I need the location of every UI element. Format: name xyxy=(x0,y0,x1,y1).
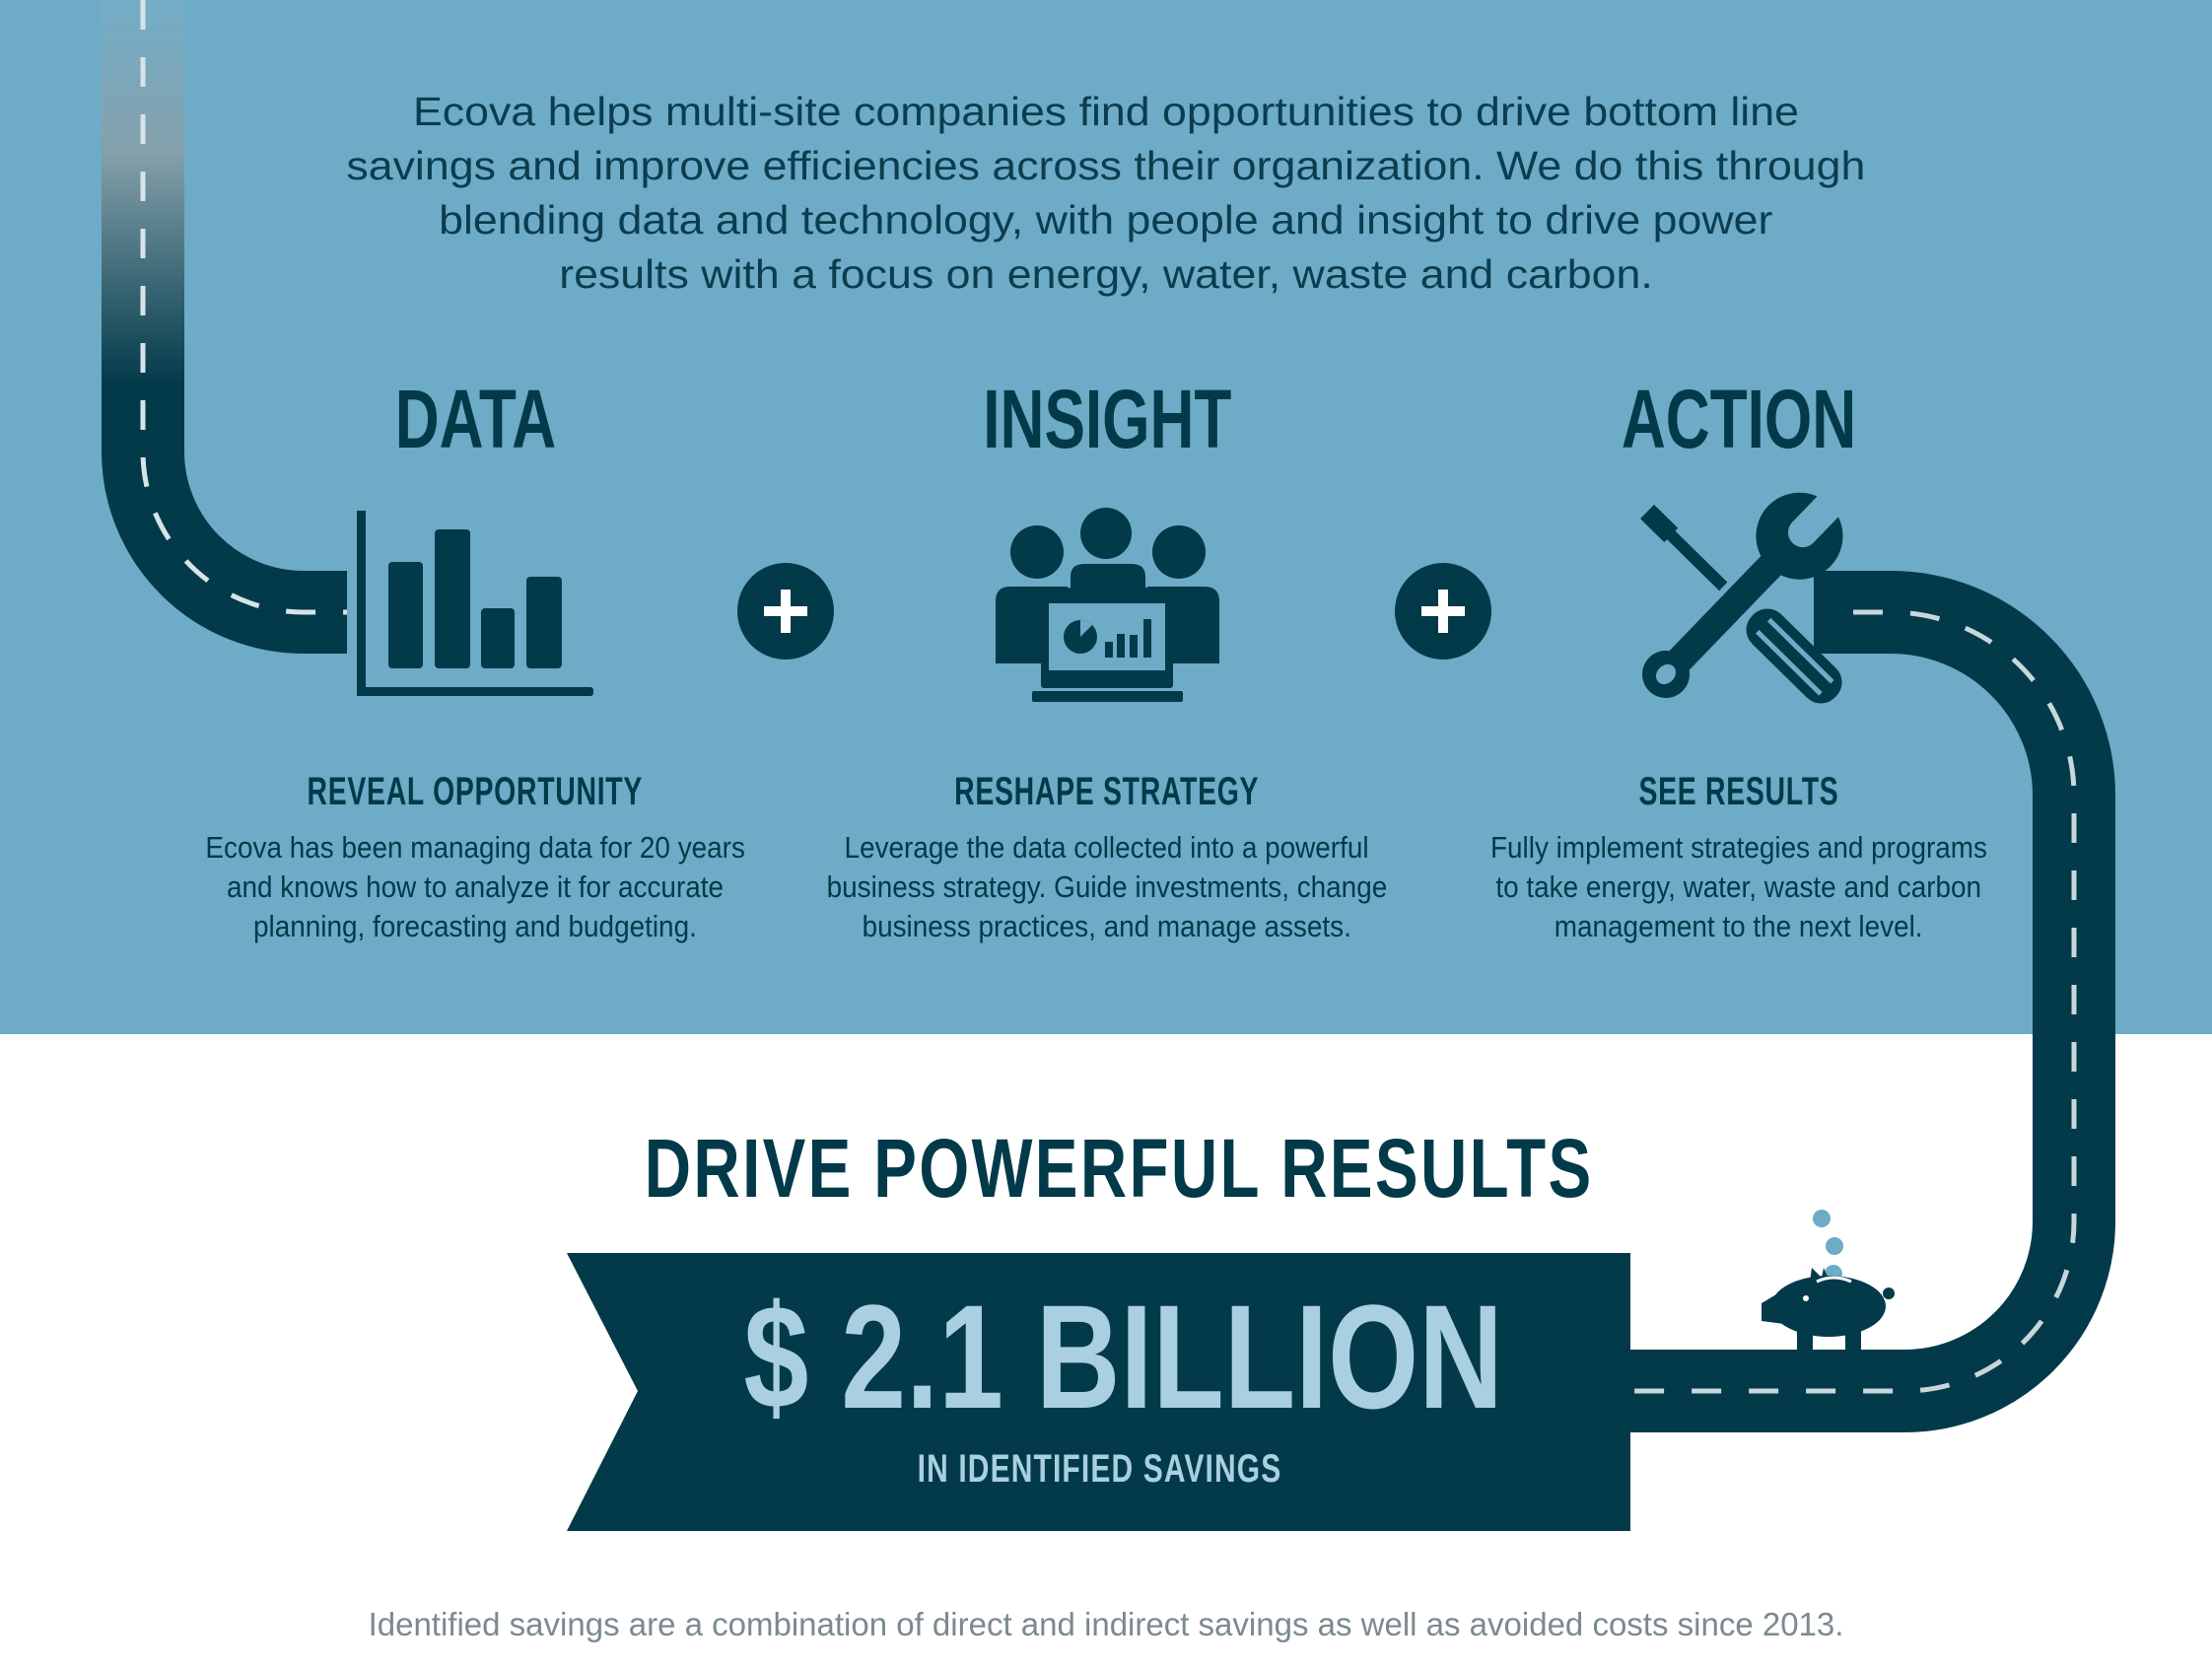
subhead and text: reshape strategy: RESHAPE STRATEGY xyxy=(954,770,1260,813)
big number: $ 2.1 BILLION xyxy=(744,1274,1503,1439)
heading: DATA: DATA xyxy=(394,373,556,465)
subhead and text: reveal opportunity xyxy=(205,770,745,943)
footer note: Identified savings are a combination of direct and indirect savings as well as avoided costs since 2013. xyxy=(369,1606,1843,1642)
icon: wrench and screwdriver xyxy=(1619,459,1875,722)
intro text: results with a focus on energy, water, waste and carbon. xyxy=(559,251,1653,297)
road: left xyxy=(143,0,347,612)
road: right xyxy=(1617,612,2074,1391)
icon: plus 1 xyxy=(737,563,834,660)
heading: drive powerful results: DRIVE POWERFUL RESULTS xyxy=(645,1122,1593,1215)
icon: plus 2 xyxy=(1395,563,1491,660)
subhead and text: reshape strategy xyxy=(827,770,1387,943)
subhead and text: reveal opportunity: and knows how to analyze it for accurate xyxy=(227,869,724,904)
icon: people with laptop xyxy=(996,508,1219,702)
intro text xyxy=(347,89,1865,297)
subhead and text: reveal opportunity: Ecova has been managing data for 20 years xyxy=(205,830,745,865)
intro text: blending data and technology, with people and insight to drive power xyxy=(439,197,1773,243)
blue background panel xyxy=(0,0,2212,1034)
subhead and text: reshape strategy: business strategy. Guide investments, change xyxy=(827,869,1387,904)
icons and plus signs xyxy=(357,493,1843,704)
icon: piggy bank with coins xyxy=(1762,1210,1895,1350)
subhead and text: reshape strategy: Leverage the data collected into a powerful xyxy=(845,830,1369,865)
subhead and text: see results: to take energy, water, waste and carbon xyxy=(1496,869,1981,904)
icon: bar chart xyxy=(357,511,593,696)
banner subtitle: IN IDENTIFIED SAVINGS xyxy=(918,1447,1282,1491)
banner: savings xyxy=(567,1253,1630,1531)
intro text: Ecova helps multi-site companies find opportunities to drive bottom line xyxy=(413,89,1799,134)
subhead and text: see results: management to the next level. xyxy=(1555,909,1923,943)
subhead and text: reveal opportunity: REVEAL OPPORTUNITY xyxy=(308,770,643,813)
subhead and text: reshape strategy: business practices, and manage assets. xyxy=(863,909,1351,943)
subhead and text: see results: Fully implement strategies and programs xyxy=(1490,830,1987,865)
heading: INSIGHT: INSIGHT xyxy=(983,373,1231,465)
subhead and text: reveal opportunity: planning, forecasting and budgeting. xyxy=(253,909,697,943)
heading: ACTION: ACTION xyxy=(1622,373,1856,465)
intro text: savings and improve efficiencies across their organization. We do this through xyxy=(347,143,1865,188)
subhead and text: see results: SEE RESULTS xyxy=(1639,770,1838,813)
subhead and text: see results xyxy=(1490,770,1987,943)
